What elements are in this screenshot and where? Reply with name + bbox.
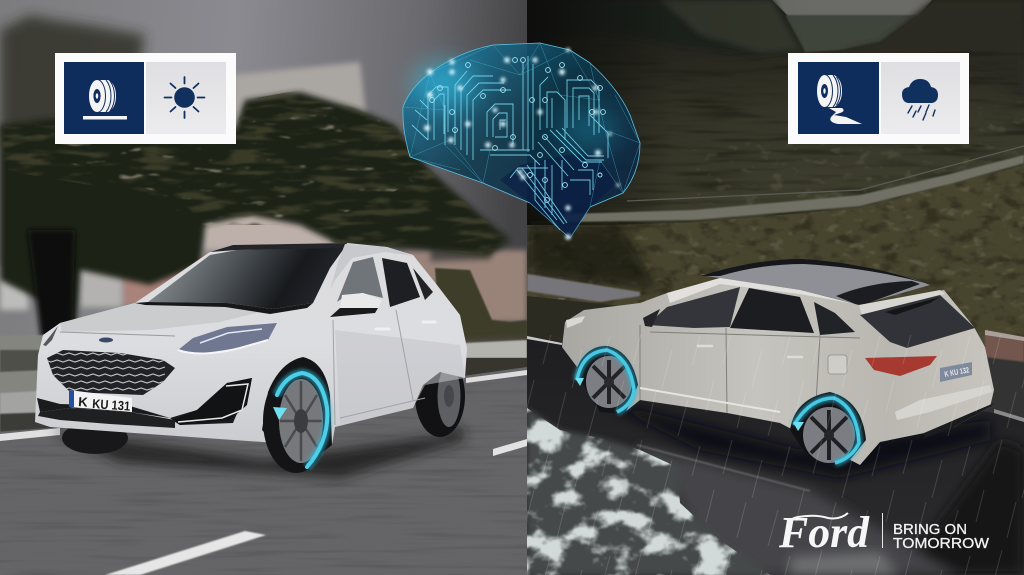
bright glow (413, 61, 477, 109)
tail light (865, 356, 937, 376)
rear window (860, 295, 975, 348)
sill highlight (640, 388, 780, 412)
ford badge on car (99, 338, 113, 342)
license plate: K KU 132 (944, 365, 970, 379)
panel: sunny road scene (0, 0, 527, 575)
side windows (647, 287, 855, 335)
license plate (940, 362, 972, 382)
logo: Ford Bring On Tomorrow: Ford (778, 508, 870, 557)
sparse upper branches (0, 15, 145, 140)
icon tile: tire on water (798, 62, 879, 134)
panel: rainy mountain scene (527, 0, 1024, 575)
slope texture (624, 52, 1024, 224)
license plate: K (78, 394, 89, 410)
lower scrub slope (527, 165, 1024, 340)
canopy foliage texture (0, 90, 510, 255)
blurred buildings (0, 62, 527, 322)
white car with glowing tire (35, 243, 467, 478)
wet road (527, 338, 1024, 538)
car body (562, 278, 994, 465)
hood highlight (60, 303, 272, 332)
brain graphic (403, 43, 640, 240)
icon tile: sun (146, 62, 226, 134)
wheel arch (262, 357, 332, 470)
rain overlay (527, 335, 1024, 575)
water splash (527, 408, 770, 575)
road (0, 367, 527, 575)
sky and valley (772, 0, 932, 16)
icon tile: tire on dry road (64, 62, 144, 134)
ring nodes (430, 58, 605, 202)
far front wheel (62, 422, 128, 454)
side windows (337, 257, 433, 307)
rear wheel (415, 355, 465, 437)
glowing nodes (424, 48, 620, 240)
spoiler (859, 290, 945, 316)
lower dark lobe (500, 154, 615, 238)
badge: dry tire and sun (55, 53, 236, 144)
crease line (60, 332, 175, 336)
headlights (43, 323, 277, 354)
brain silhouette (403, 43, 640, 238)
tree canopy (0, 92, 510, 340)
roof strip (210, 243, 347, 252)
dark mountain sides (648, 0, 781, 53)
license plate: KU 131 (92, 396, 131, 414)
upper body highlight (667, 278, 855, 304)
badge: wet tire and rain (788, 53, 969, 144)
wall and pavement (36, 334, 44, 348)
logo: Ford Bring On Tomorrow: TOMORROW (893, 536, 989, 552)
winding mountain road (564, 155, 1024, 222)
door lines and handles (640, 325, 860, 420)
windshield (148, 247, 345, 309)
dark shade behind brain (527, 0, 662, 225)
logo: Ford Bring On Tomorrow (778, 508, 989, 557)
bush (435, 268, 527, 342)
icon tile: rain cloud (881, 62, 960, 134)
fuel door (828, 355, 847, 374)
lower bumper intake (37, 378, 252, 425)
tree trunk (28, 230, 75, 345)
circuit traces (412, 56, 608, 230)
canopy gaps (60, 106, 414, 226)
silver car with glowing tires (562, 259, 994, 478)
front wheel (263, 369, 329, 473)
grille (45, 350, 175, 395)
polygon mesh (403, 43, 640, 207)
headlight (566, 316, 585, 328)
license plate (69, 390, 132, 414)
rear wheel (790, 392, 866, 470)
logo: Ford Bring On Tomorrow: BRING ON (893, 522, 967, 538)
body shading (335, 330, 465, 425)
roof (700, 259, 930, 305)
rear bumper (924, 403, 994, 438)
door lines and handles (333, 310, 425, 425)
road verge (637, 445, 960, 575)
mirror (643, 309, 660, 327)
upper rock patches (690, 100, 1024, 212)
car body (35, 243, 467, 445)
road markings (0, 428, 60, 441)
guardrail (527, 274, 640, 302)
glowing tire ring (273, 373, 327, 467)
front wheel (575, 346, 638, 414)
mirror (330, 293, 382, 317)
